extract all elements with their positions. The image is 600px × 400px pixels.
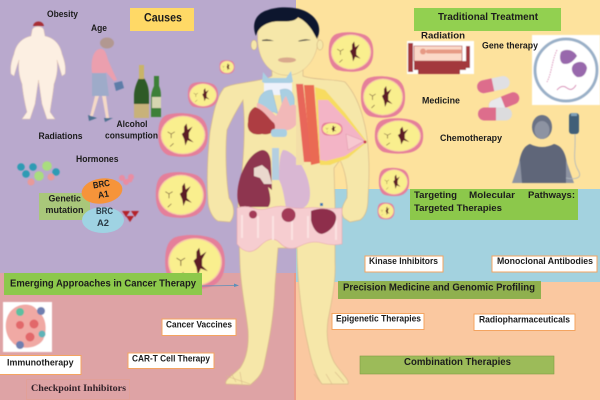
cause labels: Radiations xyxy=(38,131,82,141)
body silhouette xyxy=(207,66,369,385)
monoclonal antibodies label xyxy=(492,256,597,272)
epigenetic therapies label: Epigenetic Therapies xyxy=(336,314,421,324)
radiopharmaceuticals label xyxy=(474,314,575,330)
heading: targeted therapies: Targeting xyxy=(414,190,457,201)
radiopharmaceuticals label: Radiopharmaceuticals xyxy=(479,314,570,324)
heading: targeted therapies: Targeted Therapies xyxy=(414,203,502,214)
BRCA1 gene ellipse: A1 xyxy=(97,189,110,200)
lower trachea xyxy=(271,129,287,137)
immunotherapy label xyxy=(0,356,81,374)
icon: elderly woman xyxy=(88,38,124,122)
heading: traditional treatment xyxy=(414,8,561,31)
treatment labels: Chemotherapy xyxy=(440,133,502,143)
cause labels: Alcohol xyxy=(116,119,148,129)
genetic mutation label xyxy=(39,193,90,220)
cause labels: Hormones xyxy=(76,154,118,164)
BRCA2 gene ellipse: BRC xyxy=(96,206,113,216)
kinase inhibitors label xyxy=(365,256,443,272)
immunotherapy label: Immunotherapy xyxy=(7,358,74,368)
icon: radiation machine xyxy=(407,41,474,74)
kinase inhibitors label: Kinase Inhibitors xyxy=(369,256,438,266)
breast section xyxy=(296,83,304,165)
heading: targeted therapies xyxy=(410,189,578,220)
heading: combination therapies xyxy=(360,356,554,374)
cause labels xyxy=(38,9,158,164)
face features xyxy=(262,39,311,42)
monoclonal antibodies label: Monoclonal Antibodies xyxy=(497,256,593,266)
icon: hormones xyxy=(119,174,134,185)
checkpoint inhibitors label: Checkpoint Inhibitors xyxy=(31,383,127,393)
BRCA1 gene ellipse: BRC xyxy=(92,178,111,191)
upper lungs xyxy=(258,89,294,116)
icon: chemotherapy patient xyxy=(512,113,580,183)
colon xyxy=(237,206,342,252)
lung diseased xyxy=(237,150,272,207)
cancer vaccines label: Cancer Vaccines xyxy=(166,320,232,330)
heading: emerging approaches xyxy=(4,273,202,295)
heading: targeted therapies: Pathways: xyxy=(528,190,575,201)
icon: medicine pills xyxy=(476,75,521,120)
liver xyxy=(248,107,275,134)
genetic mutation label: Genetic xyxy=(48,194,81,204)
cancer vaccines label xyxy=(162,319,236,336)
checkpoint inhibitors label xyxy=(26,380,130,400)
arrow xyxy=(202,284,239,287)
BRCA2 gene ellipse: A2 xyxy=(97,218,109,228)
genetic mutation label: mutation xyxy=(46,205,84,216)
cause labels: consumption xyxy=(105,130,158,140)
CAR-T label: CAR-T Cell Therapy xyxy=(132,354,210,364)
icon: gene therapy petri dish xyxy=(532,35,600,105)
epigenetic therapies label xyxy=(332,314,424,330)
BRCA2 gene ellipse xyxy=(82,206,124,233)
foot toes xyxy=(226,372,344,384)
treatment labels: Radiation xyxy=(421,30,465,42)
heading: precision medicine: Precision Medicine and Genomic Profiling xyxy=(343,282,535,294)
stomach and intestine xyxy=(257,96,299,130)
icon: radiation particles xyxy=(17,161,60,186)
treatment labels xyxy=(421,30,538,143)
CAR-T label xyxy=(128,353,214,368)
heading: targeted therapies: Molecular xyxy=(469,190,515,201)
cause labels: Obesity xyxy=(47,9,78,19)
heading: precision medicine xyxy=(338,281,541,299)
icon: immunotherapy cells xyxy=(3,302,52,352)
heading: causes: Causes xyxy=(144,10,182,24)
cancer cells around the body xyxy=(156,32,423,289)
icon: mutation triangles xyxy=(122,211,139,222)
heading: causes xyxy=(130,8,194,31)
icon: obese man xyxy=(11,22,65,119)
treatment labels: Medicine xyxy=(422,96,460,106)
ears xyxy=(251,40,257,50)
human body figure xyxy=(207,7,369,385)
cause labels: Age xyxy=(91,23,107,33)
hair xyxy=(254,7,319,39)
treatment labels: Gene therapy xyxy=(482,40,538,50)
heading: emerging approaches: Emerging Approaches in Cancer Therapy xyxy=(10,278,196,290)
heading: traditional treatment: Traditional Treatment xyxy=(438,11,538,23)
icon: alcohol bottles xyxy=(134,65,161,118)
head xyxy=(258,18,318,75)
heading: combination therapies: Combination Therapies xyxy=(404,357,511,368)
BRCA1 gene ellipse xyxy=(80,176,124,206)
thyroid xyxy=(262,71,293,85)
lung healthy xyxy=(279,150,310,208)
